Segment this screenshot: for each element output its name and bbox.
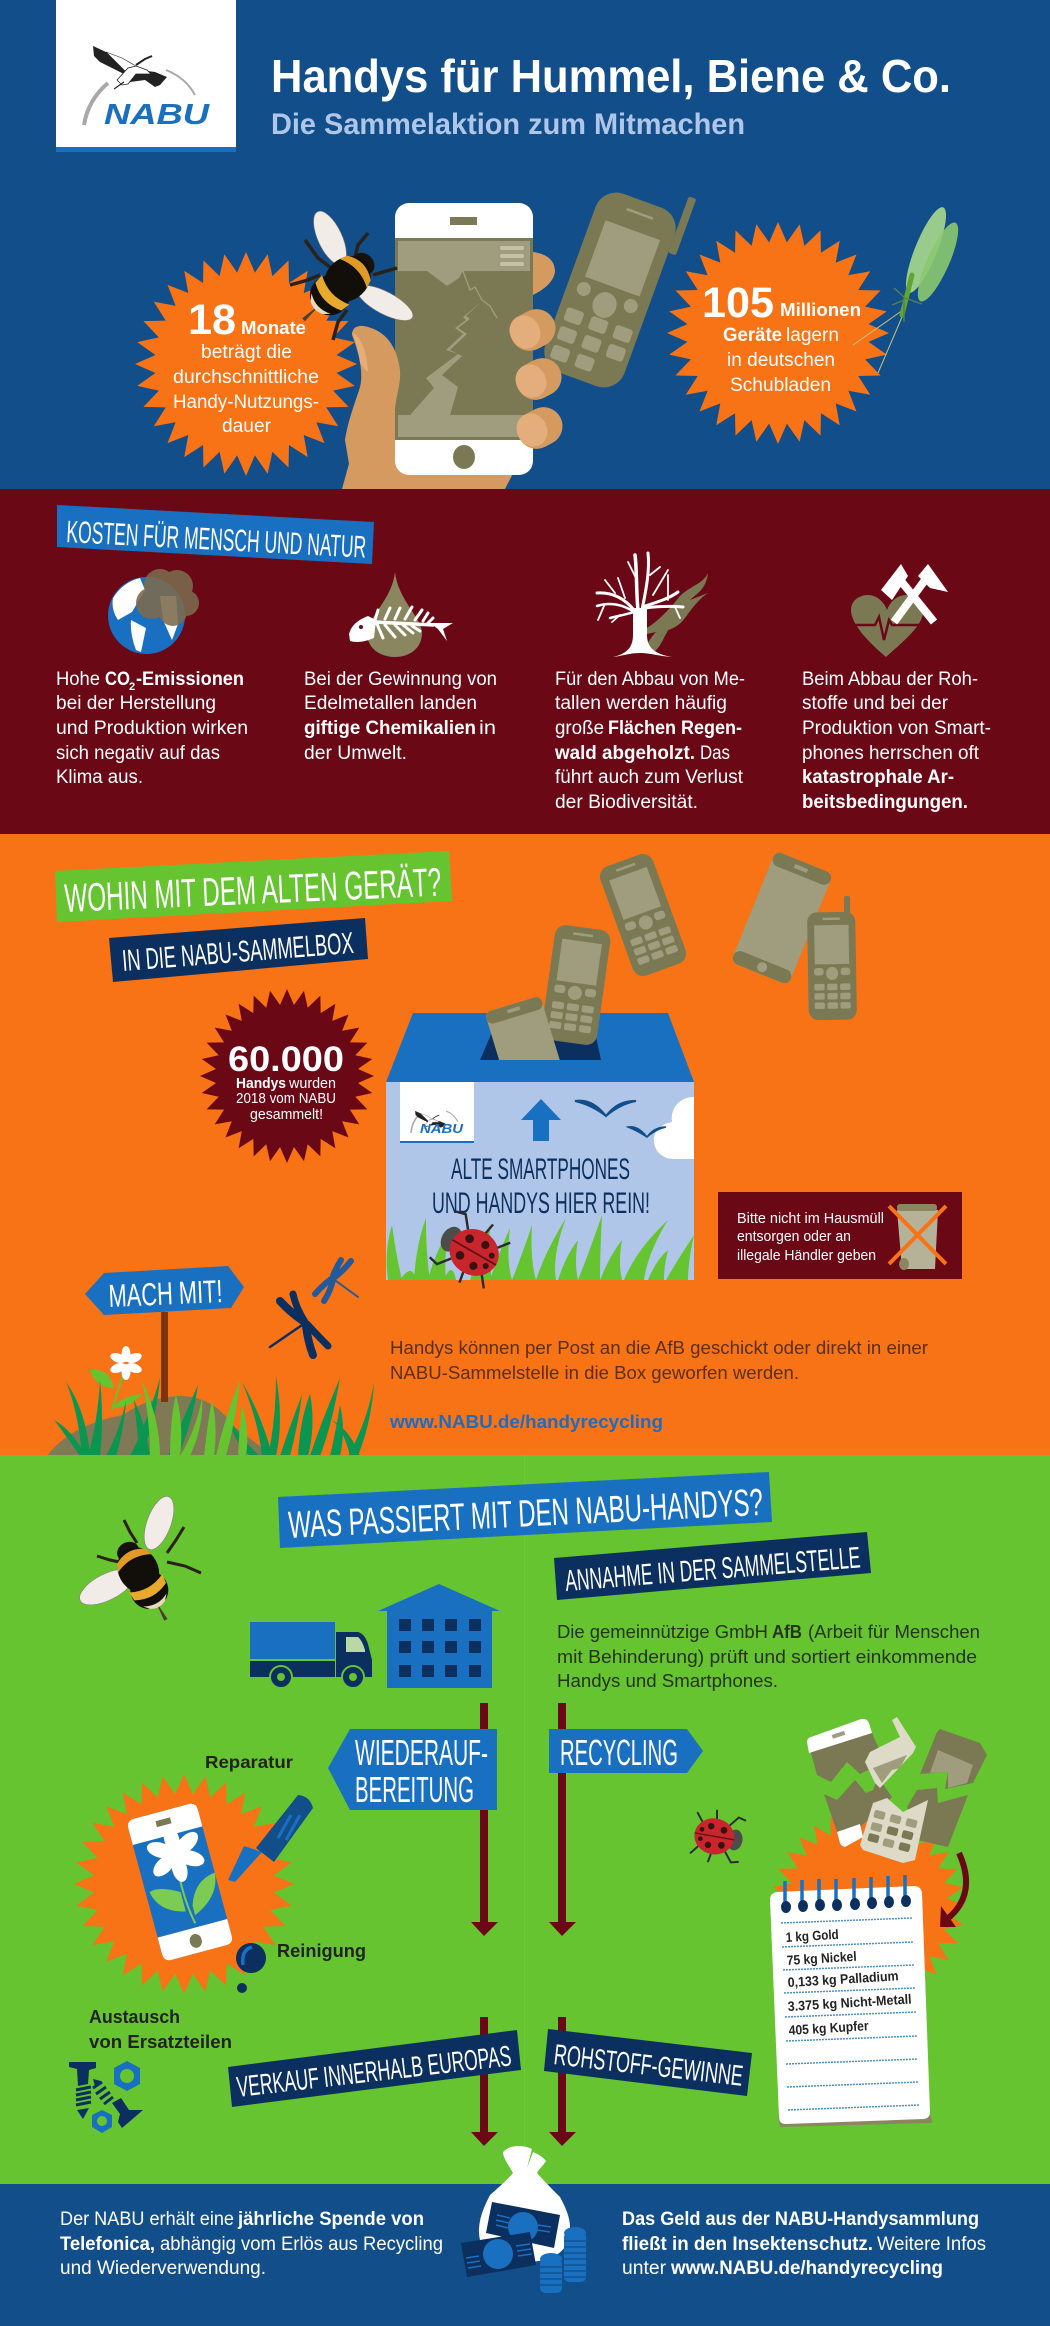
text: rainforest: der Biodiversität. [555,792,698,813]
text: insect protection: www.NABU.de/handyrecycling [670,2258,943,2279]
icon: truck [250,1622,372,1688]
text: recycling yields: 0,133 kg Palladium [787,1968,899,1990]
text: post or box: Handys können per Post an die AfB geschickt oder direkt in einer [390,1338,928,1358]
heading: Wohin [55,851,452,922]
callout: 105 Millionen: Geräte [723,325,782,346]
text: AfB: mit Behinderung) prüft und sortiert einkommende [557,1647,977,1667]
illustration: collection box [386,924,694,1280]
text: insect protection: Das Geld aus der NABU-Handysammlung [622,2209,979,2230]
label: Ersatzteile: Austausch [89,2007,180,2027]
text: chemicals [304,669,497,764]
text: recycling yields: 405 kg Kupfer [788,2018,870,2038]
text: rainforest: Flächen Regen- [608,718,742,739]
callout: 60.000: 60.000 [228,1040,344,1079]
illustration: money bag [461,2146,586,2293]
icon: ladybug [689,1807,747,1867]
callout: 18 Monate [135,252,357,476]
heading: Was passiert: WAS PASSIERT MIT DEN NABU-HANDYS? [287,1482,764,1547]
callout: 18 Monate: dauer [222,416,272,437]
heading: Wohin: WOHIN MIT DEM ALTEN GERÄT? [63,861,442,921]
sign: Wiederaufbereitung: BEREITUNG [355,1769,474,1810]
subheading: Annahme [554,1532,871,1600]
banner: Verkauf [228,2030,521,2107]
text: working conditions: Beim Abbau der Roh- [802,669,978,690]
text: chemicals: der Umwelt. [304,743,407,764]
icon: up arrow [521,1099,561,1141]
text: donation: Telefonica, [60,2234,155,2255]
icon: dead tree with fire [597,553,708,657]
callout: 105 Millionen: in deutschen [727,350,835,371]
text: CO2: sich negativ auf das [56,743,220,764]
illustration: broken phones [807,1717,987,1863]
banner: Rohstoff: ROHSTOFF-GEWINNE [552,2039,745,2093]
callout: not in household waste: entsorgen oder an [737,1228,851,1245]
callout: 60.000: 2018 vom NABU [236,1091,336,1107]
text: recycling yields: 1 kg Gold [785,1927,839,1945]
text: box label: UND HANDYS HIER REIN! [432,1187,650,1220]
notepad [770,1875,932,2127]
label: Ersatzteile [89,2007,232,2052]
arrow: left lower [471,2017,498,2146]
illustration: falling phones [597,851,857,1020]
logo: mini NABU [400,1082,474,1143]
logo: NABU [56,0,236,152]
text: rainforest: tallen werden häufig [555,693,727,714]
text: working conditions: beitsbedingungen. [802,792,968,813]
text: working conditions: stoffe und bei der [802,693,949,714]
icon: bumblebee [74,1493,201,1630]
text: post or box: NABU-Sammelstelle in die Box geworfen werden. [390,1363,799,1383]
text: rainforest: große [555,718,604,739]
text: box label [432,1153,650,1220]
label: Reparatur: Reparatur [205,1752,293,1772]
icon: screwdriver [228,1795,313,1882]
subtitle: Die Sammelaktion zum Mitmachen [271,108,745,141]
callout: 60.000: wurden [288,1076,336,1092]
sign: Recycling: RECYCLING [560,1732,678,1773]
callout: 18 Monate: beträgt die [201,342,292,363]
subheading: Sammelbox [109,918,368,982]
callout: 105 Millionen: Schubladen [730,375,831,396]
illustration: meadow with sign [47,1312,374,1456]
callout: 105 Millionen: Millionen [780,300,861,320]
illustration: recycling burst [771,1809,965,2003]
text: working conditions: Produktion von Smart- [802,718,991,739]
sign: Mach mit [85,1266,244,1315]
title: Handys für Hummel, Biene & Co. [271,50,951,102]
icon: birds [575,1101,666,1137]
sign: Recycling [549,1729,703,1773]
callout: 18 Monate: 18 [188,296,236,344]
text: rainforest [554,669,745,813]
panel: footer [0,2146,1050,2326]
text: chemicals: giftige Chemikalien [304,718,476,739]
callout: not in household waste: illegale Händler geben [737,1247,876,1264]
callout: not in household waste [718,1192,962,1279]
icon: fish skeleton in droplet [349,572,453,657]
callout: 18 Monate: Monate [241,318,306,338]
arrow: left upper [471,1703,498,1936]
arrow: right upper [549,1703,576,1936]
label: Reinigung [236,1941,366,1993]
text: rainforest: führt auch zum Verlust [555,767,744,788]
icon: bumblebee [289,207,418,340]
text: CO2: CO [105,669,130,690]
callout: 60.000 [200,989,374,1163]
callout: 60.000: gesammelt! [250,1107,323,1123]
text: working conditions [802,669,991,813]
icon: dragonfly small [315,1260,358,1301]
text: CO2: -Emissionen [136,669,244,690]
banner: Rohstoff [544,2029,752,2096]
sign: Wiederaufbereitung [328,1729,497,1810]
text: recycling yields: 3.375 kg Nicht-Metall [787,1991,912,2014]
text: chemicals: in [479,718,496,739]
callout: 105 Millionen: 105 [702,279,774,327]
heading: Kosten [57,505,374,565]
icon: heart with hammers [851,564,948,657]
text: recycling yields: 75 kg Nickel [786,1949,857,1968]
panel: costs [0,489,1050,834]
icon: lacewing [853,203,966,373]
text: insect protection: unter [622,2258,667,2279]
callout: not in household waste: Bitte nicht im Hausmüll [737,1210,884,1227]
panel: where to [0,834,1050,1456]
icon: crossed-out bin [889,1204,946,1270]
icon: ladybug [426,1205,514,1295]
text: post or box [390,1338,928,1383]
heading: Was passiert [278,1472,772,1548]
link: www.NABU.de/handyrecycling [389,1412,663,1432]
logo: mini NABU: NABU [420,1122,464,1136]
text: CO2: 2 [129,681,135,693]
text: CO2: Hohe [56,669,100,690]
arrow: curved [940,1853,966,1927]
heading: Kosten: KOSTEN FÜR MENSCH UND NATUR [66,514,367,565]
callout: 105 Millionen: lagern [786,325,839,346]
sign: Wiederaufbereitung: WIEDERAUF- [355,1732,488,1773]
text: rainforest: Das [700,743,730,764]
text: donation: jährliche Spende von [237,2209,424,2230]
illustration: hands with phones [342,168,696,489]
text: CO2: bei der Herstellung [56,693,216,714]
grass [387,1215,694,1280]
text: CO2 [56,669,248,788]
text: CO2: und Produktion wirken [56,718,248,739]
label: Ersatzteile: von Ersatzteilen [89,2032,232,2052]
icon: building [378,1584,500,1688]
label: Reinigung: Reinigung [277,1941,366,1961]
illustration: repaired phone [74,1774,294,1994]
text: AfB: Handys und Smartphones. [557,1671,778,1691]
banner: Verkauf: VERKAUF INNERHALB EUROPAS [235,2040,513,2104]
text: rainforest: Für den Abbau von Me- [555,669,745,690]
arrow: right lower [549,2017,576,2146]
text: AfB [557,1622,980,1691]
text: AfB: Die gemeinnützige GmbH [557,1622,768,1642]
text: box label: ALTE SMARTPHONES [451,1153,630,1186]
text: rainforest: wald abgeholzt. [554,743,695,764]
text: insect protection: Weitere Infos [877,2234,986,2255]
text: insect protection: fließt in den Insektenschutz. [622,2234,873,2255]
text: donation: abhängig vom Erlös aus Recycling [160,2234,443,2255]
text: chemicals: Bei der Gewinnung von [304,669,497,690]
logo: NABU: NABU [104,99,210,131]
text: working conditions: katastrophale Ar- [802,767,954,788]
callout: 18 Monate: Handy-Nutzungs- [173,392,319,413]
callout: 18 Monate: durchschnittliche [173,367,319,388]
callout: 60.000: Handys [236,1076,286,1092]
text: AfB: AfB [772,1622,802,1642]
panel: what happens [0,1455,1050,2184]
icon: dragonfly large [270,1294,328,1355]
panel: header [0,0,1050,490]
icon: screws and nuts [69,2061,143,2133]
text: recycling yields [785,1927,912,2038]
text: AfB: (Arbeit für Menschen [808,1622,980,1642]
text: donation [60,2209,443,2279]
subheading: Sammelbox: IN DIE NABU-SAMMELBOX [121,927,355,978]
icon: globe with smoke [108,569,199,654]
sign: Mach mit: MACH MIT! [108,1273,223,1314]
text: donation: und Wiederverwendung. [60,2258,266,2279]
text: CO2: Klima aus. [56,767,143,788]
text: working conditions: phones herrschen oft [802,743,980,764]
text: chemicals: Edelmetallen landen [304,693,477,714]
text: insect protection [622,2209,986,2279]
callout: 105 Millionen [667,222,889,444]
text: donation: Der NABU erhält eine [60,2209,234,2230]
